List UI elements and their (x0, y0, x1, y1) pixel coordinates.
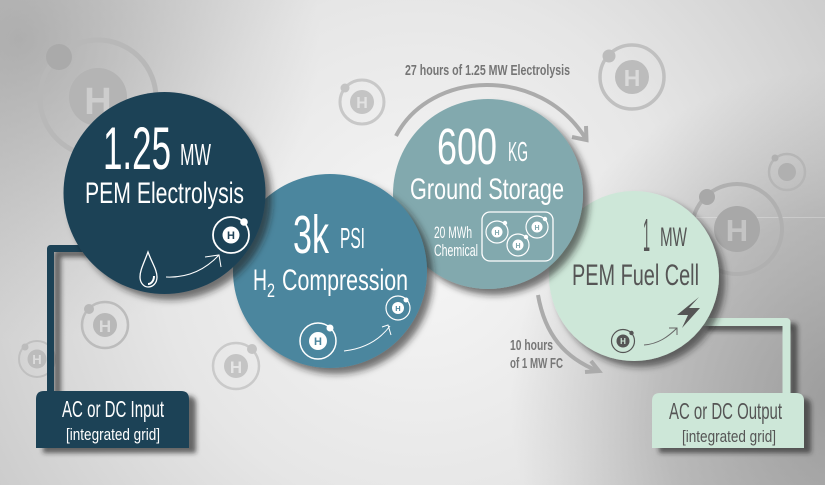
storage chemical energy: Chemical (434, 241, 478, 260)
panel: PEM fuel cell: 1 (643, 209, 650, 261)
label: 10 hours of fuel cell (510, 337, 563, 372)
panel: H2 compression (233, 174, 427, 368)
storage chemical energy (434, 223, 478, 260)
arrow: atom to bolt (644, 328, 677, 345)
electrolysis title: PEM Electrolysis (85, 177, 244, 210)
icon: hydrogen atom (612, 330, 634, 352)
storage title: Ground Storage (410, 173, 564, 206)
panel: ground storage: KG (508, 136, 528, 167)
background atom: large left (40, 40, 156, 156)
output connector and box (652, 322, 804, 448)
background atom: lower left (82, 302, 128, 348)
icon: storage tank with atoms: H (494, 230, 500, 237)
electrolysis unit: MW (180, 137, 211, 172)
input box subtext: [integrated grid] (66, 425, 160, 444)
icon: storage tank with atoms (482, 212, 553, 261)
background hydrogen atoms (19, 40, 805, 389)
compression title: 2 (267, 281, 275, 302)
arrow: water to hydrogen (166, 255, 221, 277)
storage value: 600 (437, 118, 497, 175)
fuel cell title: PEM Fuel Cell (572, 259, 699, 292)
arrow: 27 hours arc (396, 85, 586, 140)
icon: compressed hydrogen atom (386, 296, 410, 320)
label: 10 hours of fuel cell: 10 hours (510, 337, 553, 354)
background atom: lower left: H (99, 317, 111, 336)
input connector (50, 248, 90, 395)
background atom: top right: H (624, 65, 640, 91)
background atom: center top (340, 80, 384, 124)
output box subtext: [integrated grid] (682, 427, 776, 446)
icon: large hydrogen atom: H (314, 336, 322, 348)
input box heading: AC or DC Input (62, 396, 164, 422)
arrow: 10 hours arc (538, 295, 599, 372)
icon: storage tank with atoms: H (515, 243, 521, 250)
compression title: Compression (282, 264, 408, 297)
background atom: large right (692, 184, 782, 274)
background atom: small right (769, 154, 805, 190)
background atom: lower middle (213, 343, 259, 389)
icon: compressed hydrogen atom: H (395, 304, 401, 313)
background atom: center top: H (356, 95, 368, 112)
background atom: lower middle: H (230, 358, 242, 377)
background atom: far lower left: H (32, 352, 42, 367)
panel: ground storage (393, 99, 583, 289)
background atom: far lower left (19, 341, 55, 377)
panel: PEM electrolysis (64, 92, 266, 294)
icon: large hydrogen atom (300, 323, 336, 359)
background atom: top right (600, 45, 664, 109)
compression value: 3k (293, 205, 330, 265)
input box (36, 391, 189, 448)
icon: storage tank with atoms: H (534, 225, 540, 232)
icon: water drop (140, 252, 157, 287)
electrolysis value: 1.25 (103, 115, 171, 182)
compression unit: PSI (340, 223, 365, 255)
label: 27 hours of electrolysis: 27 hours of 1.25 MW Electrolysis (405, 62, 570, 79)
compression title: H (253, 264, 267, 297)
icon: hydrogen atom: H (227, 230, 235, 242)
label: 10 hours of fuel cell: of 1 MW FC (510, 355, 563, 372)
background atom: large left: H (84, 81, 112, 123)
background atom: large right: H (726, 213, 748, 248)
arrow: compression (344, 325, 391, 351)
icon: hydrogen atom: H (620, 337, 626, 346)
fuel cell unit: MW (660, 222, 687, 252)
icon: hydrogen atom (213, 217, 249, 253)
storage chemical energy: 20 MWh (434, 223, 472, 242)
icon: lightning bolt (677, 297, 700, 328)
panel: PEM fuel cell (549, 191, 719, 361)
compression title (253, 264, 408, 302)
